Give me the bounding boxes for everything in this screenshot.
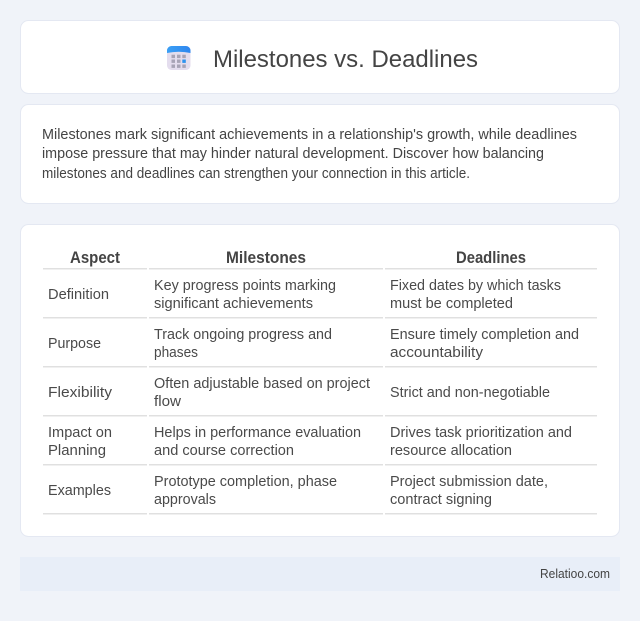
- table row: definition: must be completed: [390, 296, 513, 312]
- panel: header: [20, 20, 620, 94]
- table header row: Deadlines: [456, 249, 526, 267]
- table row: examples: approvals: [154, 492, 216, 508]
- title: Milestones vs. Deadlines: [213, 46, 478, 73]
- footer credit: Relatioo.com: [540, 567, 610, 581]
- table row: examples: Examples: [48, 483, 111, 499]
- table row: definition: Fixed dates by which tasks: [390, 278, 561, 294]
- table row: purpose: accountability: [390, 345, 484, 361]
- table header row: Milestones: [226, 249, 306, 267]
- table row: purpose: [48, 327, 579, 361]
- table row: definition: [48, 278, 561, 312]
- table row: impact on planning: and course correction: [154, 443, 294, 459]
- table row: impact on planning: Helps in performance evaluation: [154, 425, 361, 441]
- table row: purpose: phases: [154, 345, 198, 361]
- table header row: [70, 249, 526, 267]
- table row: purpose: Track ongoing progress and: [154, 327, 332, 343]
- panel: introduction: [20, 104, 620, 204]
- table row: impact on planning: Drives task prioritization and: [390, 425, 572, 441]
- text block: introduction: milestones and deadlines can strengthen your connection in this article.: [42, 166, 470, 182]
- table row: impact on planning: resource allocation: [390, 443, 512, 459]
- table row: impact on planning: Planning: [48, 443, 106, 459]
- footer: [20, 557, 620, 591]
- table row: examples: contract signing: [390, 492, 492, 508]
- text block: introduction: [42, 127, 577, 182]
- icon: calendar: [167, 46, 190, 70]
- table row: definition: significant achievements: [154, 296, 313, 312]
- table row: definition: Key progress points marking: [154, 278, 336, 294]
- table row: examples: Prototype completion, phase: [154, 474, 337, 490]
- table row: purpose: Ensure timely completion and: [390, 327, 579, 343]
- table row: flexibility: Flexibility: [48, 385, 113, 401]
- table row: flexibility: Often adjustable based on project: [154, 376, 370, 392]
- table row: flexibility: [48, 376, 550, 410]
- table row: flexibility: flow: [154, 394, 181, 410]
- panel: comparison table: [20, 224, 620, 536]
- table row: impact on planning: Impact on: [48, 425, 112, 441]
- table row: purpose: Purpose: [48, 336, 101, 352]
- text block: introduction: Milestones mark significant achievements in a relationship's growth, while deadlines: [42, 127, 577, 143]
- table row: flexibility: Strict and non-negotiable: [390, 385, 550, 401]
- table row: examples: [48, 474, 548, 508]
- table header row: Aspect: [70, 249, 120, 267]
- text block: introduction: impose pressure that may hinder natural development. Discover how balancing: [42, 146, 544, 162]
- table row: examples: Project submission date,: [390, 474, 548, 490]
- table row: definition: Definition: [48, 287, 109, 303]
- table row: impact on planning: [48, 425, 572, 459]
